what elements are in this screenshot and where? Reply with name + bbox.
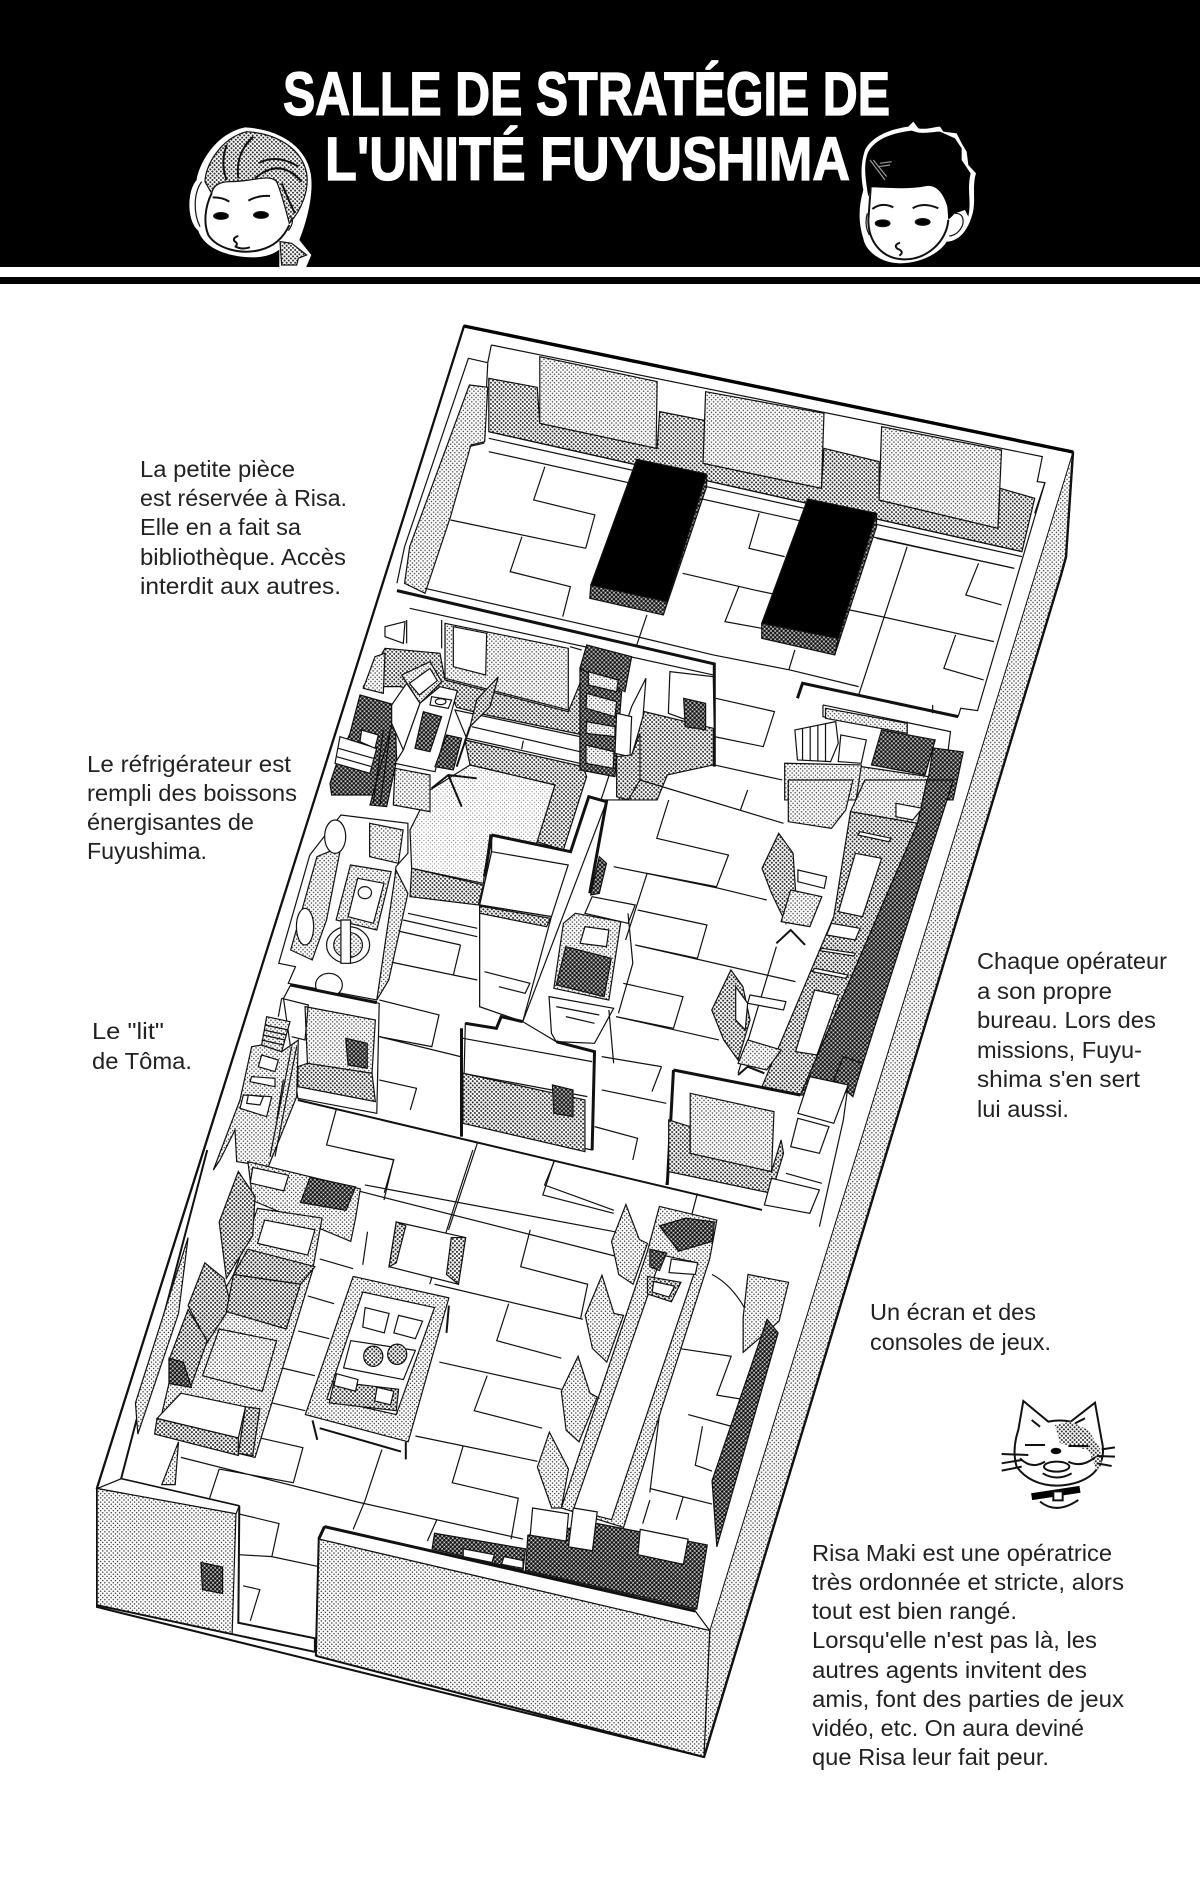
room: central zone with kitchen, fridge and office bbox=[279, 780, 953, 1233]
caption: small room: est réservée à Risa. bbox=[140, 485, 347, 511]
icon: cat mascot bbox=[1002, 1401, 1115, 1508]
caption: operators: shima s'en sert bbox=[977, 1066, 1141, 1092]
caption: small room: interdit aux autres. bbox=[140, 573, 341, 599]
floor plan building bbox=[97, 326, 1073, 1757]
floor tiles bbox=[327, 780, 795, 1233]
chair two bbox=[712, 970, 786, 1075]
block wall with socket bbox=[461, 1017, 595, 1152]
office chair bbox=[432, 677, 498, 807]
bookshelf bbox=[580, 645, 632, 777]
caption: fridge bbox=[87, 751, 297, 864]
caption: Risa Maki: Risa Maki est une opératrice bbox=[812, 1540, 1112, 1566]
room: Fuyushima's office corner bbox=[330, 620, 640, 905]
caption: fridge: Le réfrigérateur est bbox=[87, 751, 292, 777]
kitchen counter bbox=[279, 815, 408, 1000]
room: living room with sofa and game console table bbox=[97, 1150, 789, 1757]
caption: Risa Maki: amis, font des parties de jeux bbox=[812, 1686, 1125, 1712]
right long desk bbox=[762, 780, 953, 1097]
caption: screen bbox=[870, 1299, 1051, 1355]
caption: small room: bibliothèque. Accès bbox=[140, 544, 346, 570]
chairs along console table bbox=[537, 1204, 647, 1508]
far wall bbox=[397, 345, 1045, 583]
partition walls bbox=[397, 483, 1045, 767]
building outer shell bbox=[97, 326, 1073, 1757]
diagonal corridor wall bbox=[298, 1100, 762, 1210]
title: SALLE DE STRATÉGIE DE bbox=[283, 60, 890, 128]
kitchen partition wall bbox=[283, 985, 379, 1113]
cabinet bbox=[788, 780, 853, 828]
caption: Risa Maki: Lorsqu'elle n'est pas là, les bbox=[812, 1627, 1097, 1653]
caption: operators bbox=[977, 948, 1167, 1122]
caption: Risa Maki: très ordonnée et stricte, alors bbox=[812, 1569, 1124, 1595]
printer stack bbox=[549, 897, 635, 1063]
caption: screen: Un écran et des bbox=[870, 1299, 1036, 1325]
sofa bbox=[155, 1171, 322, 1457]
caption: screen: consoles de jeux. bbox=[870, 1329, 1051, 1355]
black bed left bbox=[590, 459, 707, 615]
header band bbox=[0, 0, 1200, 284]
caption: operators: Chaque opérateur bbox=[977, 948, 1167, 974]
caption: small room: Elle en a fait sa bbox=[140, 514, 301, 540]
black bed right bbox=[762, 499, 877, 655]
title bbox=[283, 60, 890, 193]
storage desk bbox=[330, 695, 397, 807]
room: Risa's small room with beds bbox=[397, 345, 1045, 800]
side pillar bbox=[615, 713, 640, 800]
caption: bed: de Tôma. bbox=[92, 1048, 192, 1074]
computer desk bbox=[392, 662, 457, 812]
far wall and curtain bbox=[363, 620, 583, 735]
floor tiles bbox=[425, 467, 1014, 747]
caption: operators: bureau. Lors des bbox=[977, 1007, 1156, 1033]
caption: small room: La petite pièce bbox=[140, 456, 295, 482]
ottoman bbox=[389, 1222, 466, 1284]
left inner wall bbox=[121, 1150, 239, 1506]
caption: fridge: Fuyushima. bbox=[87, 838, 207, 864]
lamp bbox=[363, 653, 385, 693]
icon: left character head bbox=[189, 127, 312, 267]
console table bbox=[561, 1206, 746, 1527]
floor strip and rug bbox=[410, 710, 587, 905]
pillar and socket bbox=[601, 672, 782, 800]
screen on right wall bbox=[643, 1275, 789, 1547]
caption: Risa Maki: que Risa leur fait peur. bbox=[812, 1744, 1049, 1770]
icon: right character head bbox=[860, 122, 976, 263]
caption: fridge: énergisantes de bbox=[87, 809, 254, 835]
shelf and Toma's bed bbox=[213, 998, 308, 1170]
caption: fridge: rempli des boissons bbox=[87, 780, 297, 806]
floor tiles bbox=[181, 1150, 741, 1621]
right office shelves bbox=[785, 705, 963, 800]
caption: operators: missions, Fuyu- bbox=[977, 1037, 1142, 1063]
caption: Risa Maki bbox=[812, 1540, 1125, 1770]
caption: operators: a son propre bbox=[977, 978, 1112, 1004]
caption: Risa Maki: vidéo, etc. On aura deviné bbox=[812, 1715, 1084, 1741]
chair one bbox=[762, 833, 827, 945]
caption: bed bbox=[92, 1018, 192, 1074]
caption: Risa Maki: autres agents invitent des bbox=[812, 1657, 1087, 1683]
counter and boxes by the front wall bbox=[432, 1508, 707, 1609]
left wall bbox=[405, 385, 488, 593]
title: L'UNITÉ FUYUSHIMA bbox=[325, 125, 850, 193]
caption: Risa Maki: tout est bien rangé. bbox=[812, 1598, 1017, 1624]
coffee table bbox=[305, 1276, 449, 1459]
front left wall bbox=[97, 1479, 315, 1652]
caption: bed: Le "lit" bbox=[92, 1018, 164, 1044]
fridge bbox=[480, 797, 606, 1022]
side table bbox=[248, 1162, 360, 1241]
front right wall bbox=[316, 1527, 710, 1757]
bottom right partition bbox=[667, 1070, 848, 1227]
caption: operators: lui aussi. bbox=[977, 1096, 1069, 1122]
caption: small room bbox=[140, 456, 347, 599]
